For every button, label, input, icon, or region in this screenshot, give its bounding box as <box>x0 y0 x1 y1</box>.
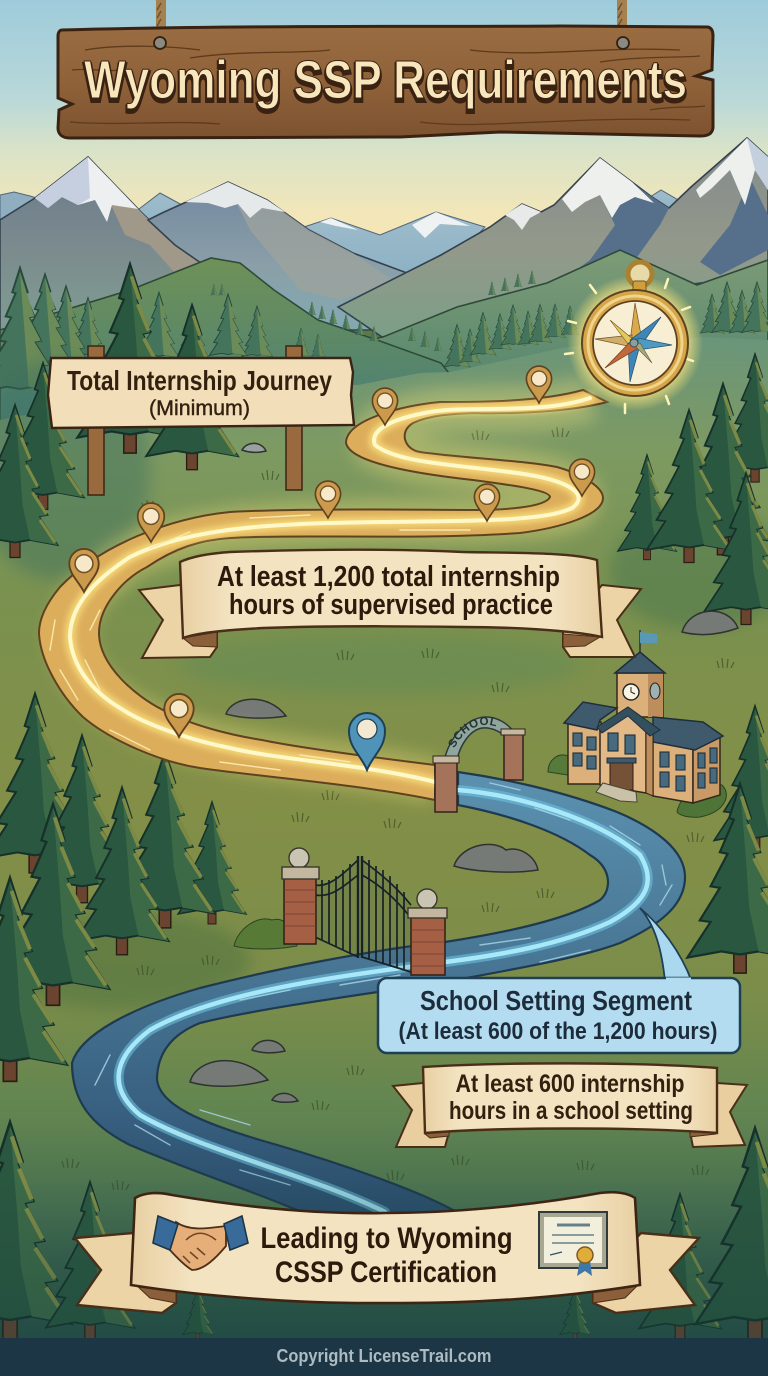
school setting segment box: (At least 600 of the 1,200 hours) <box>398 1018 718 1045</box>
main mountains <box>0 138 768 340</box>
school arch sign: SCHOOL <box>448 717 496 748</box>
school arch sign <box>432 716 526 813</box>
left lower trees <box>0 694 246 1081</box>
second peak <box>148 182 407 330</box>
bottom banner: Leading to Wyoming <box>260 1222 512 1255</box>
callout: school setting segment <box>378 908 740 1053</box>
bushes <box>548 755 568 775</box>
rocks <box>190 443 738 1102</box>
golden map pins <box>69 366 595 737</box>
banner: 600 hours: At least 600 internship <box>456 1070 684 1098</box>
banner: 600 hours: hours in a school setting <box>449 1097 693 1125</box>
windows <box>573 733 717 791</box>
lower scene shading <box>0 1120 768 1338</box>
icon: certificate <box>539 1212 607 1276</box>
bottom trees <box>0 1122 768 1342</box>
wings <box>568 722 601 784</box>
clock tower <box>617 673 663 717</box>
distant mountains <box>0 190 680 290</box>
footer bar <box>0 1338 768 1376</box>
school setting segment box: School Setting Segment <box>420 985 692 1016</box>
compass <box>565 262 703 413</box>
bottom banner <box>75 1192 699 1313</box>
banner: 1,200 hours: At least 1,200 total internship <box>217 561 560 593</box>
icon: handshake <box>153 1216 248 1270</box>
meadow <box>0 337 768 1340</box>
banner: 1,200 hours: hours of supervised practice <box>229 589 553 621</box>
school building <box>548 630 726 817</box>
right lower trees <box>687 706 768 973</box>
background tree line <box>0 268 768 391</box>
school setting segment box <box>378 978 740 1053</box>
door and steps <box>610 763 633 790</box>
bush <box>234 919 297 949</box>
sign: total internship journey: (Minimum) <box>149 397 250 420</box>
hills <box>0 250 768 440</box>
blue path <box>72 772 685 1225</box>
left peak <box>0 157 260 340</box>
right upper trees <box>618 354 768 624</box>
grass tufts <box>62 427 734 1190</box>
banner: 600 hours <box>393 1063 747 1147</box>
lower corners shading <box>0 1180 768 1338</box>
sign: total internship journey <box>48 346 354 495</box>
sky <box>0 0 768 300</box>
sign: total internship journey: Total Internship Journey <box>67 365 332 396</box>
bottom banner: CSSP Certification <box>275 1256 497 1289</box>
left upper trees <box>0 264 238 558</box>
footer bar: Copyright LicenseTrail.com <box>276 1346 492 1366</box>
meadow shadows and lighter glow <box>0 360 768 1010</box>
title sign <box>58 0 713 138</box>
iron gate <box>282 848 447 975</box>
golden path <box>39 390 607 800</box>
banner: 1,200 hours <box>139 550 641 658</box>
right peaks <box>338 138 768 337</box>
blue map pin <box>349 713 385 770</box>
